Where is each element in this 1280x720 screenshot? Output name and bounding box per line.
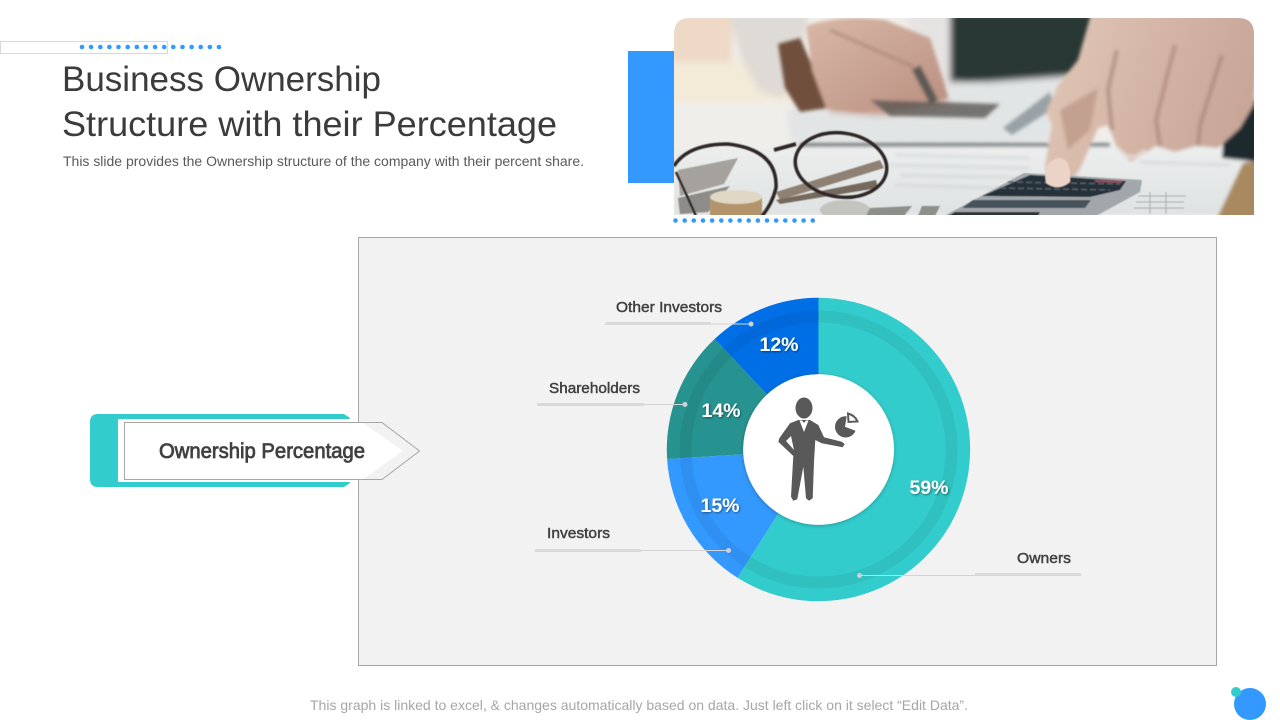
callout: Shareholders: Shareholders: [549, 380, 640, 397]
calculator: [944, 158, 1186, 216]
arrow label box: [124, 422, 420, 480]
inner darker ring band: [686, 316, 952, 582]
ribbon: Ownership Percentage: [90, 414, 420, 487]
title: Business Ownership: [62, 60, 381, 99]
panel: chart background: [358, 238, 1216, 666]
callout: Investors: Investors: [547, 525, 610, 542]
percent labels: 12%: [759, 334, 799, 356]
callout: Owners: Owners: [1017, 550, 1071, 567]
percent labels: 14%: [701, 400, 741, 422]
dotted line: top: [80, 45, 221, 49]
callout: Owners: [857, 550, 1081, 578]
callout: Investors: [535, 525, 731, 553]
glasses: [674, 127, 940, 220]
slice: Owners 59%: [738, 298, 970, 601]
percent labels: 59%: [909, 477, 949, 499]
donut chart: [667, 298, 970, 601]
callout: Other Investors: [605, 299, 754, 326]
title: Structure with their Percentage: [62, 105, 557, 144]
right hand: [1045, 14, 1260, 186]
title: [62, 60, 557, 144]
ribbon text: Ownership Percentage: [159, 440, 365, 463]
callout: Shareholders: [537, 380, 688, 407]
blue accent block: [628, 51, 674, 183]
photo: hands using calculator with glasses: [670, 12, 1260, 220]
decorative circles bottom right: [1231, 687, 1266, 720]
slice: Other Investors 12%: [715, 298, 818, 395]
percent labels: 15%: [700, 495, 740, 517]
percent labels: [700, 334, 949, 517]
slice: Shareholders 14%: [667, 339, 767, 459]
footer note: This graph is linked to excel, & changes automatically based on data. Just left click on it select “Edit Data”.: [310, 697, 968, 713]
centre white circle: [743, 374, 894, 525]
icon: businessman with pie chart: [778, 398, 858, 501]
callout: Other Investors: Other Investors: [616, 299, 722, 316]
top left outlined strip: [0, 42, 168, 54]
dotted line: under photo: [673, 218, 815, 223]
slice: Investors 15%: [667, 454, 778, 578]
ribbon teal backing: [90, 414, 350, 487]
subtitle: This slide provides the Ownership structure of the company with their percent share.: [63, 153, 584, 169]
